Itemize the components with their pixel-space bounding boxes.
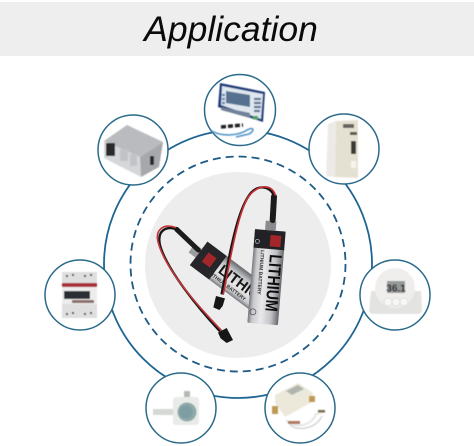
outer ring: [104, 130, 372, 398]
panel: servo drive: [309, 114, 379, 184]
panel: din rail meter: [45, 260, 115, 330]
monitor: [218, 83, 265, 122]
right battery: LITHIUM BATTERY: [255, 250, 265, 295]
panel: flow transmitter: [146, 373, 216, 443]
dashed inner ring: [130, 156, 346, 372]
centre grey disc: [145, 172, 331, 358]
panel: heat meter: [265, 373, 335, 443]
title: Application: [142, 9, 318, 49]
panel: data terminal: [204, 74, 276, 146]
right battery: LITHIUM: [261, 254, 286, 312]
lcd reading: 36.1: [386, 284, 406, 294]
panel: thermostat: [360, 260, 430, 330]
right battery connector: [213, 296, 225, 310]
right battery wires: [222, 187, 275, 294]
left battery wires: [157, 226, 222, 331]
left battery: LITHIO: [215, 262, 263, 304]
left battery connector: [218, 328, 233, 343]
right battery: [247, 220, 286, 325]
cables: [210, 129, 253, 137]
left battery: LITHIUM BATTERY: [207, 271, 247, 303]
header band: [0, 2, 474, 56]
central batteries: [157, 187, 286, 343]
left battery: [183, 236, 279, 319]
panel: metal enclosure: [98, 115, 168, 185]
